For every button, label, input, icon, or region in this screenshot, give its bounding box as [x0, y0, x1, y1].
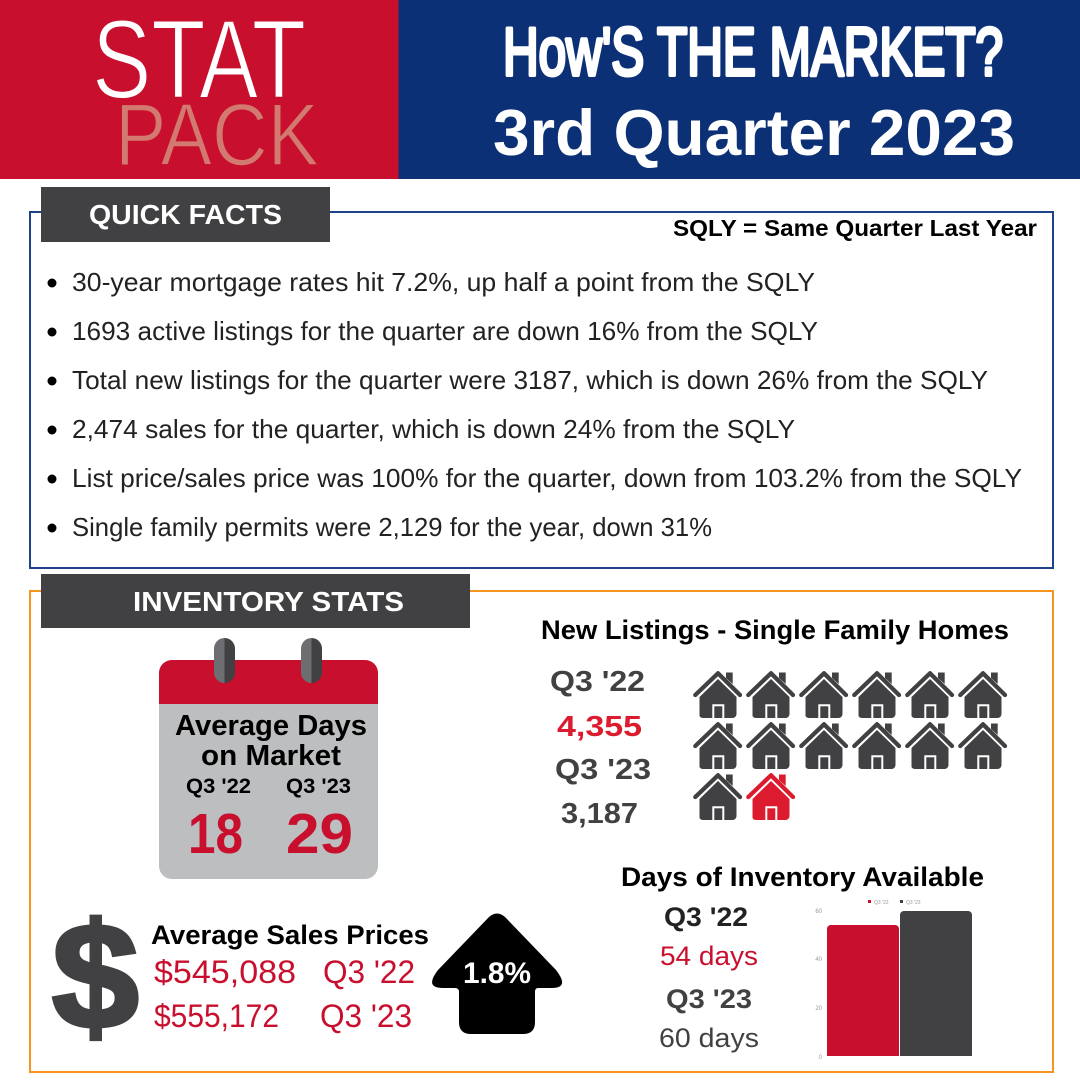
- stat: q3 23 days: 60 days: [659, 1023, 759, 1053]
- heading: new listings: New Listings - Single Family Homes: [541, 615, 1009, 645]
- header: title panel: [398, 0, 1080, 179]
- panel: quick facts: [30, 187, 1053, 568]
- y axis labels: 0: [819, 1055, 823, 1061]
- legend: Q3 '23: [906, 900, 921, 906]
- stat: q3 23 new listings: [555, 754, 651, 830]
- stat: q3 23 days: [659, 984, 759, 1053]
- calendar: average days on market: Q3 '22: [186, 775, 251, 798]
- stat: q3 23 days: Q3 '23: [666, 984, 752, 1014]
- bullet list: [48, 267, 1022, 542]
- legend: Q3 '22: [874, 900, 889, 906]
- stat: q3 22 days: 54 days: [660, 941, 758, 971]
- prices: Q3 '22: [323, 954, 415, 990]
- stat pack logo: [92, 0, 319, 184]
- stat: q3 22 new listings: 4,355: [557, 711, 642, 743]
- legend: [868, 900, 921, 906]
- bullet list: 30-year mortgage rates hit 7.2%, up half a point from the SQLY: [72, 267, 815, 297]
- note: SQLY definition: SQLY = Same Quarter Last Year: [673, 215, 1037, 241]
- arrow: price change up: [432, 914, 562, 1034]
- stat: q3 22 new listings: Q3 '22: [550, 666, 645, 698]
- bar: q3 22: [827, 925, 899, 1056]
- bullet list: Single family permits were 2,129 for the year, down 31%: [72, 512, 712, 542]
- heading: inventory stats: INVENTORY STATS: [133, 586, 404, 617]
- bullet list: 2,474 sales for the quarter, which is down 24% from the SQLY: [72, 414, 795, 444]
- calendar: average days on market: 29: [286, 802, 353, 866]
- stat pack logo: STAT: [92, 0, 306, 122]
- heading: quick facts: [41, 187, 330, 242]
- stat: q3 22 new listings: [550, 666, 645, 743]
- section: new listings: [541, 615, 1009, 830]
- heading: inventory stats: [41, 574, 470, 628]
- stat: q3 23 new listings: Q3 '23: [555, 754, 651, 786]
- y axis labels: [815, 909, 823, 1061]
- y axis labels: 20: [815, 1006, 823, 1012]
- y axis labels: 60: [815, 909, 823, 915]
- section: average sales prices: [52, 893, 562, 1060]
- icon: dollar sign: $: [52, 893, 139, 1060]
- prices: [154, 954, 415, 1034]
- bullet list: List price/sales price was 100% for the quarter, down from 103.2% from the SQLY: [72, 463, 1022, 493]
- heading: days of inventory: Days of Inventory Available: [621, 862, 984, 892]
- icon: calendar rings: [214, 638, 322, 683]
- y axis labels: 40: [815, 957, 823, 963]
- stat pack logo: PACK: [115, 85, 319, 184]
- prices: $545,088: [154, 954, 296, 990]
- prices: Q3 '23: [320, 998, 412, 1034]
- calendar: average days on market: on Market: [201, 740, 341, 772]
- arrow: price change up: 1.8%: [463, 957, 531, 990]
- calendar: average days on market: Q3 '23: [286, 775, 351, 798]
- bullet list: 1693 active listings for the quarter are down 16% from the SQLY: [72, 316, 818, 346]
- heading: average sales prices: Average Sales Prices: [151, 920, 429, 950]
- heading: quick facts: QUICK FACTS: [89, 199, 282, 230]
- calendar: average days on market: Average Days: [175, 710, 367, 742]
- subtitle: quarter: 3rd Quarter 2023: [493, 96, 1015, 169]
- header: stat pack panel: [0, 0, 398, 184]
- calendar: average days on market: [159, 638, 378, 879]
- panel: inventory stats: [30, 574, 1053, 1072]
- stat: q3 23 new listings: 3,187: [561, 798, 638, 830]
- pictogram: houses: [695, 672, 1005, 820]
- bar chart: days of inventory: [815, 900, 972, 1061]
- stat: q3 22 days: Q3 '22: [664, 902, 748, 932]
- prices: $555,172: [154, 998, 279, 1034]
- bar: q3 23: [900, 911, 972, 1056]
- section: days of inventory: [621, 862, 984, 1061]
- calendar: average days on market: 18: [188, 802, 243, 866]
- bullet list: Total new listings for the quarter were 3187, which is down 26% from the SQLY: [72, 365, 988, 395]
- stat: q3 22 days: [660, 902, 758, 971]
